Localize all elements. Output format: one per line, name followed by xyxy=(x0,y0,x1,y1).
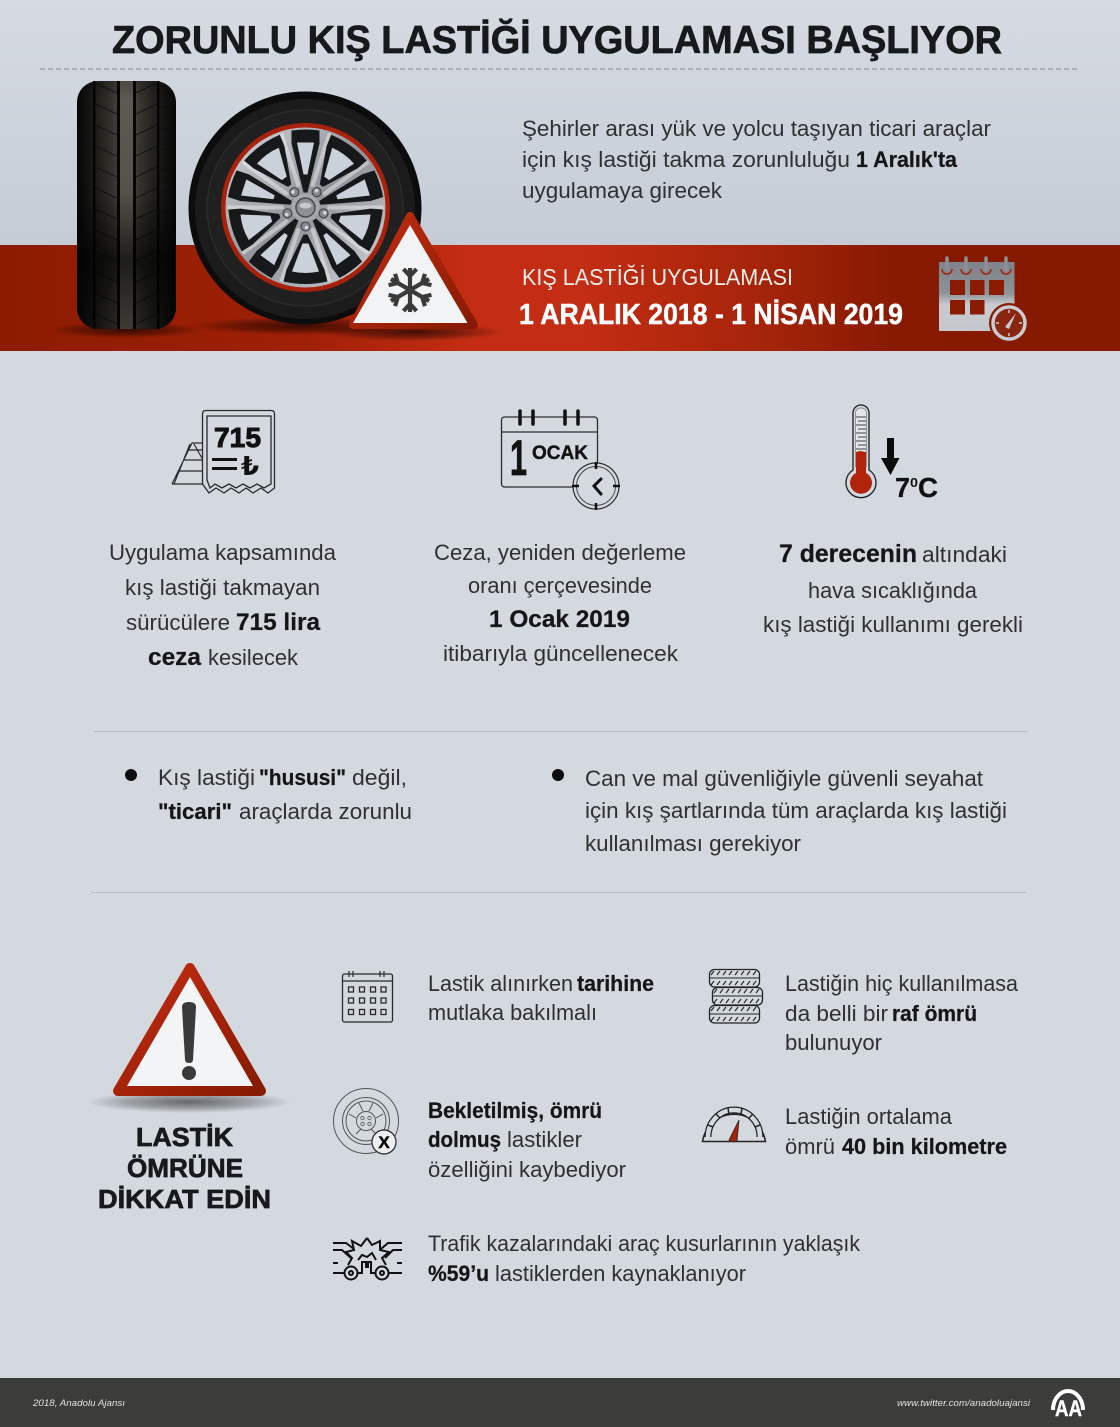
logo: AA: AA xyxy=(1055,1396,1082,1421)
title: ZORUNLU KIŞ LASTİĞİ UYGULAMASI BAŞLIYOR xyxy=(112,18,1002,62)
text: revaluation: itibarıyla güncellenecek xyxy=(443,641,679,666)
text: temperature: 7 derecenin xyxy=(779,540,917,568)
red date band xyxy=(0,245,1120,351)
heading: tire life: DİKKAT EDİN xyxy=(98,1184,271,1214)
heading: tire life: ÖMRÜNE xyxy=(127,1153,243,1183)
icon: small calendar xyxy=(342,971,392,1022)
text: date: Lastik alınırken xyxy=(428,971,573,996)
icon: speedometer gauge xyxy=(702,1108,766,1142)
text: accidents: %59’u xyxy=(428,1261,489,1286)
intro text block: Şehirler arası yük ve yolcu taşıyan ticari araçlar xyxy=(522,116,992,141)
text: fine: kesilecek xyxy=(208,645,299,670)
icon: wheel with x xyxy=(334,1088,398,1154)
text: shelf life: raf ömrü xyxy=(892,1001,977,1026)
illustration: tire tread xyxy=(50,81,202,338)
text: expired tires: özelliğini kaybediyor xyxy=(428,1157,626,1182)
text: revaluation: 1 Ocak 2019 xyxy=(489,606,630,633)
bullet: private vs commercial: Kış lastiği xyxy=(158,765,255,790)
text: temperature: altındaki xyxy=(922,542,1007,567)
text: fine: Uygulama kapsamında xyxy=(109,540,336,565)
bullet: private vs commercial: değil, xyxy=(352,765,407,790)
intro text block: için kış lastiği takma zorunluluğu xyxy=(522,147,850,172)
text: temperature xyxy=(763,540,1023,637)
text: fine: kış lastiği takmayan xyxy=(125,575,320,600)
bullet: private vs commercial: "ticari" xyxy=(158,799,232,824)
text: fine: ceza xyxy=(148,644,202,671)
icon: thermometer 7 degrees: 7 xyxy=(895,472,910,503)
text: date: mutlaka bakılmalı xyxy=(428,1000,597,1025)
heading: tire life: LASTİK xyxy=(136,1122,233,1152)
text: revaluation: oranı çerçevesinde xyxy=(468,573,652,598)
text: accidents: lastiklerden kaynaklanıyor xyxy=(495,1261,746,1286)
icon: calendar 1 Ocak with clock: OCAK xyxy=(532,442,588,464)
illustration: wheel xyxy=(188,92,422,335)
text: revaluation: Ceza, yeniden değerleme xyxy=(434,540,686,565)
text: date xyxy=(428,971,654,1025)
text: shelf life: da belli bir xyxy=(785,1001,889,1026)
text: expired tires xyxy=(428,1098,626,1182)
bullet: safety: için kış şartlarında tüm araçlarda kış lastiği xyxy=(585,798,1007,823)
icon: snow warning triangle xyxy=(320,216,504,341)
footer bar xyxy=(0,1378,1120,1427)
icon: calendar 1 Ocak with clock xyxy=(502,411,620,510)
text: temperature: kış lastiği kullanımı gerekli xyxy=(763,612,1023,637)
text: expired tires: lastikler xyxy=(507,1127,582,1152)
icon: calendar with gauge xyxy=(939,258,1029,343)
bullet: safety: kullanılması gerekiyor xyxy=(585,831,801,856)
bullet: private vs commercial: araçlarda zorunlu xyxy=(239,799,412,824)
icon: car crash xyxy=(333,1238,402,1280)
icon: thermometer 7 degrees: 0 xyxy=(910,475,918,490)
text: expired tires: dolmuş xyxy=(428,1127,501,1152)
text: average life: ömrü xyxy=(785,1134,835,1159)
band heading: KIŞ LASTİĞİ UYGULAMASI xyxy=(522,264,793,290)
bullet: private vs commercial xyxy=(125,765,412,824)
footer url: www.twitter.com/anadoluajansi xyxy=(897,1398,1031,1409)
text: temperature: hava sıcaklığında xyxy=(808,578,977,603)
text: revaluation xyxy=(434,540,686,666)
text: shelf life: bulunuyor xyxy=(785,1030,882,1055)
icon: calendar 1 Ocak with clock: 1 xyxy=(510,430,527,486)
intro text block xyxy=(522,116,992,203)
text: average life: 40 bin kilometre xyxy=(842,1134,1007,1159)
text: fine: 715 lira xyxy=(236,609,321,636)
band dates: 1 ARALIK 2018 - 1 NİSAN 2019 xyxy=(519,299,903,331)
text: accidents xyxy=(428,1231,861,1286)
text: average life: Lastiğin ortalama xyxy=(785,1104,952,1129)
text: date: tarihine xyxy=(577,971,654,996)
intro text block: 1 Aralık'ta xyxy=(856,147,957,172)
icon: thermometer 7 degrees xyxy=(846,405,938,503)
intro text block: uygulamaya girecek xyxy=(522,178,723,203)
icon: stacked tires xyxy=(710,970,762,1023)
text: accidents: Trafik kazalarındaki araç kusurlarının yaklaşık xyxy=(428,1231,861,1256)
text: fine: sürücülere xyxy=(126,610,230,635)
icon: fine receipt 715 TL: 715 xyxy=(214,422,261,453)
bullet: safety: Can ve mal güvenliğiyle güvenli seyahat xyxy=(585,766,984,791)
icon: warning triangle xyxy=(87,968,291,1113)
text: shelf life xyxy=(785,971,1018,1055)
icon: thermometer 7 degrees: C xyxy=(918,472,938,503)
heading: tire life xyxy=(98,1122,271,1214)
text: expired tires: Bekletilmiş, ömrü xyxy=(428,1098,602,1123)
footer copyright: 2018, Anadolu Ajansı xyxy=(32,1398,125,1409)
bullet: private vs commercial: "hususi" xyxy=(259,765,346,790)
icon: fine receipt 715 TL xyxy=(172,410,274,493)
bullet: safety xyxy=(552,766,1007,856)
text: average life xyxy=(785,1104,1007,1159)
icon: fine receipt 715 TL: ₺ xyxy=(241,452,259,482)
text: fine xyxy=(109,540,336,671)
text: shelf life: Lastiğin hiç kullanılmasa xyxy=(785,971,1018,996)
icon: wheel with x: X xyxy=(378,1133,390,1152)
